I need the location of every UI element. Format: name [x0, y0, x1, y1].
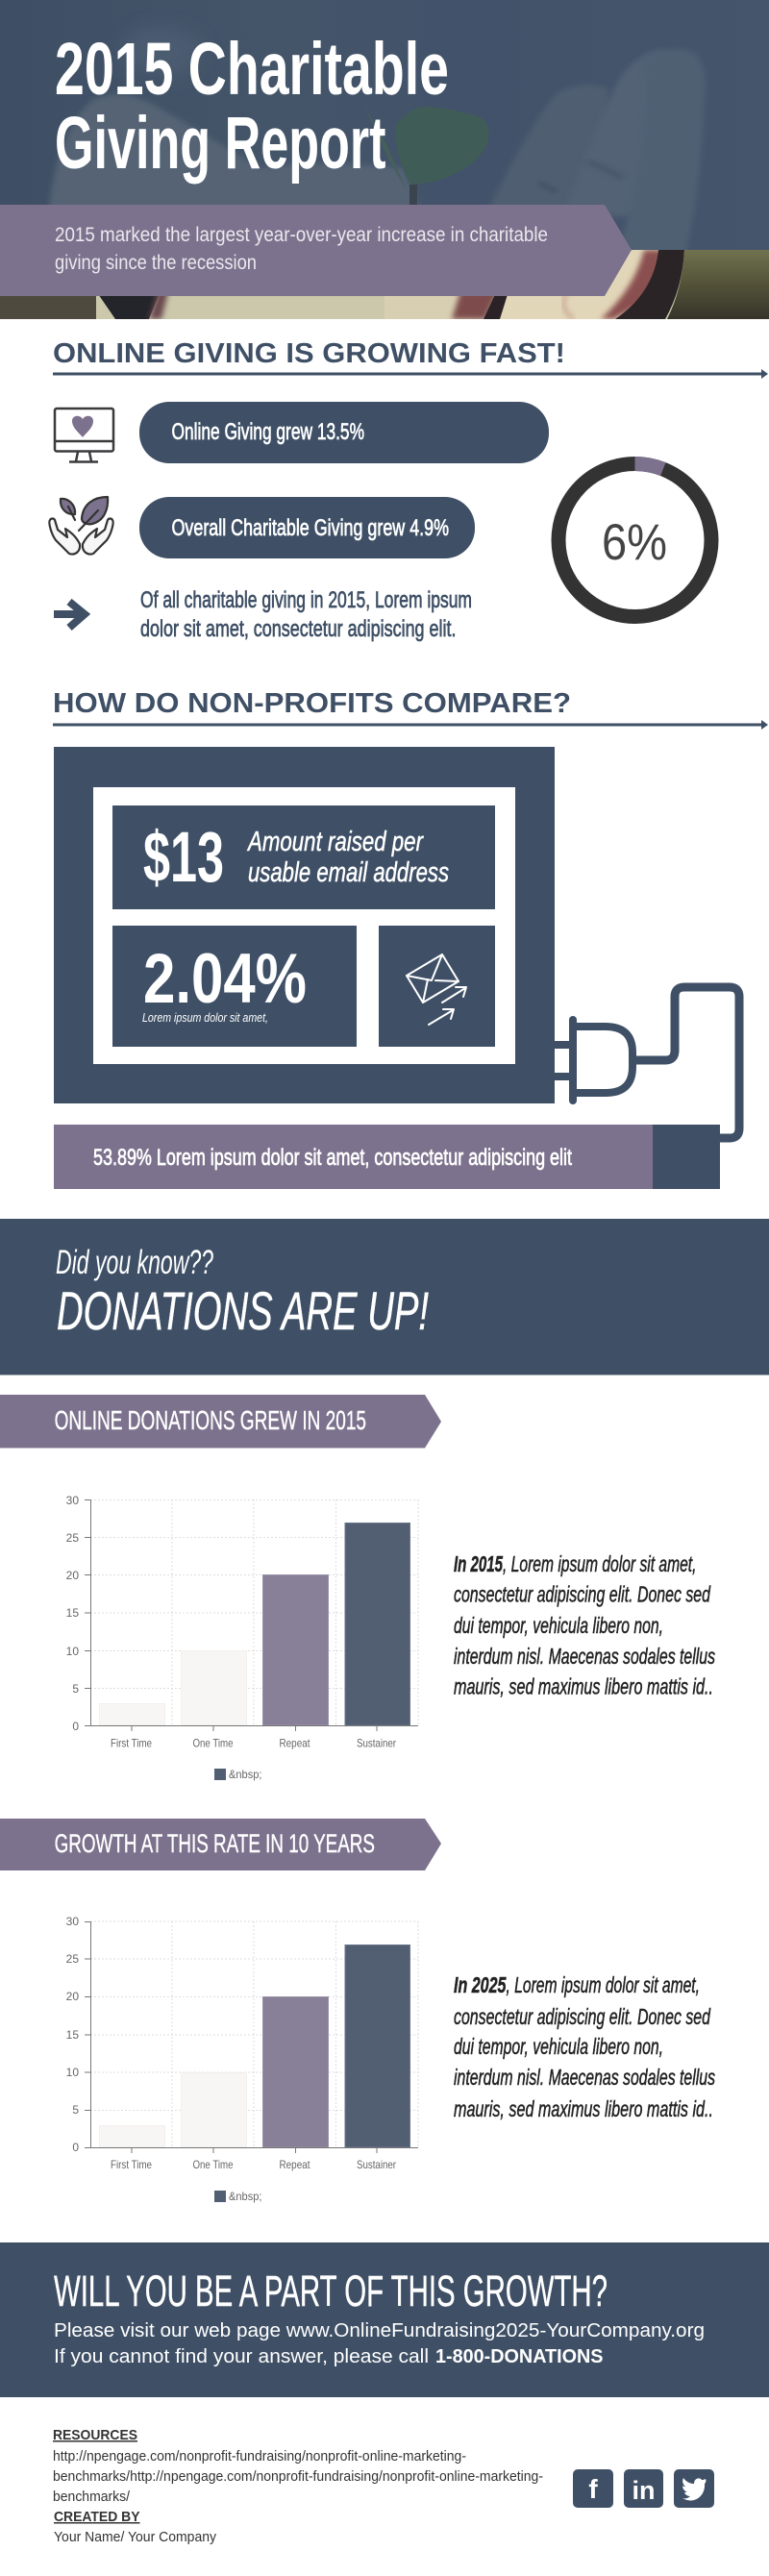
text: share of giving — [140, 587, 472, 642]
resources — [53, 2427, 543, 2505]
panel: call to action: 1-800-DONATIONS — [435, 2346, 604, 2367]
bar chart: 2015: 5 — [72, 1682, 79, 1696]
bar chart: 2015: 30 — [66, 1494, 79, 1507]
bar chart: 2025: One Time — [192, 2158, 234, 2171]
heading: compare — [53, 688, 768, 730]
panel: call to action: Please visit our web page www.OnlineFundraising2025-YourCompany.org — [54, 2320, 705, 2341]
panel: appliance screen — [54, 747, 555, 1103]
stat card: $13 — [112, 805, 495, 909]
bar chart: 2025: 30 — [66, 1915, 79, 1928]
bar chart: 2015: Repeat — [279, 1736, 310, 1749]
bar: 53.89%: 53.89% Lorem ipsum dolor sit amet, consectetur adipiscing elit — [93, 1145, 572, 1171]
icon: hands and leaves — [49, 497, 113, 555]
chart legend: &nbsp; — [229, 1768, 261, 1781]
bar chart: 2025: Sustainer — [357, 2158, 396, 2171]
stat card: 2.04%: 2.04% — [143, 940, 307, 1018]
bar chart: 2015: 15 — [66, 1606, 79, 1620]
section: non-profits compare — [53, 688, 768, 1189]
text: share of giving: dolor sit amet, consectetur adipiscing elit. — [140, 616, 456, 642]
stat card: $13: usable email address — [248, 857, 449, 888]
icon: twitter — [674, 2469, 714, 2508]
chart legend: &nbsp; — [229, 2190, 261, 2203]
text: share of giving: Of all charitable giving in 2015, Lorem ipsum — [140, 587, 472, 613]
donut chart: 6% — [558, 463, 711, 617]
icon: linkedin: in — [633, 2476, 656, 2505]
icon card: envelope — [379, 926, 495, 1047]
resources: benchmarks/ — [53, 2489, 131, 2505]
text block: 2025: dui tempor, vehicula libero non, — [454, 2034, 663, 2059]
bar chart: 2025: 5 — [72, 2103, 79, 2117]
bar: 53.89% — [54, 1125, 720, 1189]
bar chart: 2015: 20 — [66, 1569, 79, 1582]
stat card: $13: Amount raised per — [246, 827, 424, 857]
bar chart: 2025: Repeat — [279, 2158, 310, 2171]
donut chart: 6%: 6% — [602, 514, 667, 571]
bar chart: 2015: One Time — [192, 1736, 234, 1749]
title: 2015 Charitable — [55, 28, 449, 111]
chart legend — [214, 2190, 261, 2203]
bar chart: 2015: 10 — [66, 1645, 79, 1658]
hero panel — [0, 0, 769, 319]
panel: call to action — [0, 2242, 769, 2397]
heading: online giving: ONLINE GIVING IS GROWING FAST! — [53, 338, 565, 369]
icon: monitor with heart — [55, 409, 113, 461]
subtitle banner — [0, 205, 632, 296]
chart legend — [214, 1768, 261, 1781]
ribbon: online donations — [0, 1395, 441, 1448]
bar chart: 2015: 25 — [66, 1531, 79, 1545]
banner: did you know — [0, 1219, 769, 1375]
bar chart: 2025: First Time — [111, 2158, 152, 2171]
bar chart: 2015: 0 — [72, 1720, 79, 1733]
text block: 2015 — [454, 1551, 715, 1699]
bar chart: 2025: 0 — [72, 2141, 79, 2154]
title — [55, 28, 449, 185]
text block: 2025 — [454, 1972, 715, 2121]
resources: benchmarks/http://npengage.com/nonprofit-fundraising/nonprofit-online-marketing- — [53, 2468, 543, 2485]
bar chart: 2025: 20 — [66, 1990, 79, 2003]
resources: RESOURCES — [53, 2427, 137, 2443]
pill: overall giving: Overall Charitable Giving grew 4.9% — [171, 515, 449, 541]
hero photo: tinted hands and seedling — [0, 0, 769, 319]
section: online giving — [49, 338, 768, 642]
ribbon: growth — [0, 1819, 441, 1870]
social icons — [573, 2469, 714, 2508]
banner: did you know: DONATIONS ARE UP! — [57, 1280, 429, 1341]
pill: online giving — [139, 402, 549, 463]
icon: facebook — [573, 2469, 613, 2508]
credits — [54, 2509, 216, 2545]
icon: plug and cord — [555, 987, 739, 1138]
heading: compare: HOW DO NON-PROFITS COMPARE? — [53, 688, 571, 719]
subtitle banner: 2015 marked the largest year-over-year increase in charitable — [55, 224, 548, 246]
pill: online giving: Online Giving grew 13.5% — [171, 419, 364, 445]
stat card: $13: $13 — [143, 817, 224, 897]
icon: arrow — [54, 602, 85, 628]
footer: resources and credits — [53, 2427, 543, 2545]
text block: 2015: dui tempor, vehicula libero non, — [454, 1613, 663, 1638]
credits: Your Name/ Your Company — [54, 2529, 216, 2545]
bar chart: 2025: 10 — [66, 2066, 79, 2079]
icon: linkedin — [624, 2469, 663, 2508]
ribbon: online donations: ONLINE DONATIONS GREW IN 2015 — [55, 1405, 366, 1435]
ribbon: growth: GROWTH AT THIS RATE IN 10 YEARS — [55, 1829, 375, 1858]
credits: CREATED BY — [54, 2509, 140, 2525]
stat card: 2.04% — [112, 926, 357, 1047]
stat card: 2.04%: Lorem ipsum dolor sit amet, — [142, 1010, 268, 1025]
subtitle banner: giving since the recession — [55, 252, 257, 274]
banner: did you know: Did you know?? — [56, 1244, 213, 1281]
title: Giving Report — [55, 102, 386, 185]
bar chart: 2025: 25 — [66, 1952, 79, 1966]
icon: facebook: f — [588, 2474, 598, 2504]
pill: overall giving — [139, 497, 475, 558]
bar chart: 2015: Sustainer — [357, 1736, 396, 1749]
text block: 2025: In 2025 — [454, 1972, 507, 1997]
resources: http://npengage.com/nonprofit-fundraising/nonprofit-online-marketing- — [53, 2448, 466, 2465]
bar chart: 2015: First Time — [111, 1736, 152, 1749]
panel: call to action: If you cannot find your answer, please call — [54, 2346, 429, 2367]
text block: 2015: In 2015 — [454, 1551, 504, 1576]
bar chart: 2025: 15 — [66, 2028, 79, 2042]
bar chart: 2025 — [66, 1915, 418, 2203]
heading: online giving — [53, 338, 768, 379]
bar chart: 2015 — [66, 1494, 418, 1781]
